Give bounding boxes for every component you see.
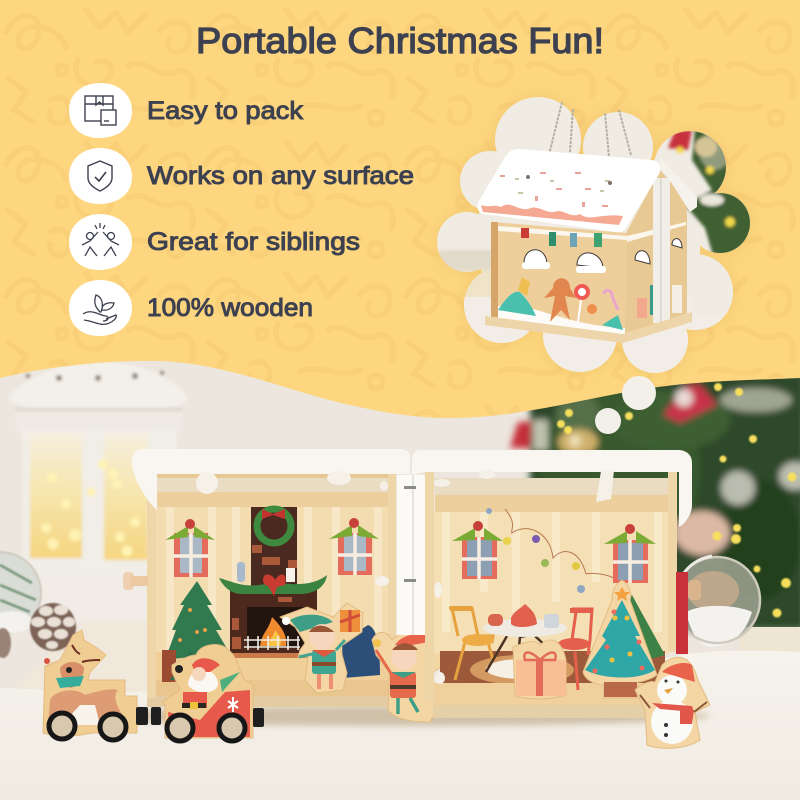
shadow under toy [90,706,710,726]
left room striped wall [156,507,388,682]
feature: easy to pack [69,83,304,138]
train: reindeer car [43,630,137,740]
feature: 100% wooden: 100% wooden [147,294,313,322]
rope knots left room [196,471,389,586]
thought cloud with closed house photo [437,97,750,373]
snowman toy [635,657,710,748]
blurred christmas tree [510,372,800,630]
side knob [123,572,148,590]
hinge panel [397,475,425,635]
feature: great for siblings: Great for siblings [147,228,360,256]
blue backpack [342,625,380,678]
feature: works on any surface: Works on any surface [147,162,414,190]
elf toy with bell [372,632,447,722]
house front wall [492,222,627,335]
chairs and tea table [449,604,593,690]
house base [485,312,692,343]
elf toy holding present [280,603,363,693]
house side print [635,239,682,318]
snow floor [0,650,800,800]
thought bubbles [595,376,656,434]
left room posts [147,465,396,698]
open house right room [412,450,710,748]
right room floor [433,683,673,718]
house hinged panel [653,178,670,323]
yellow wave header with squiggle pattern [0,0,800,418]
glass bauble right [674,556,760,647]
gift toy [513,640,566,699]
train: santa sleigh car [162,645,264,741]
glass bauble left [0,552,41,634]
left room windows [165,518,379,577]
left room floor [147,652,397,707]
feature: great for siblings [69,214,360,270]
right room dark floor and rug [440,651,665,687]
pine cones [0,603,76,658]
rope handles [547,102,631,168]
right room top plank [435,478,668,512]
string lights [486,508,618,593]
cream tabletop [0,622,800,700]
right room windows [452,521,656,583]
house windows and stockings [521,228,606,273]
blurred lantern [8,361,188,622]
open house left room [123,449,447,722]
left room top plank [157,478,388,507]
christmas tree toy [583,580,657,698]
house side wall [625,170,687,336]
wall christmas tree [162,581,229,682]
right room roof [412,450,692,527]
feature list [69,83,414,336]
train connector [136,707,161,725]
background fir tree [620,595,665,662]
red side latch [676,572,701,654]
feature: 100% wooden [69,280,313,336]
rope knots right room [434,469,614,684]
right room posts [425,466,677,701]
fireplace and chimney [219,507,327,658]
feature: works on any surface [69,148,414,204]
feature: easy to pack: Easy to pack [147,97,304,125]
right room striped wall [433,512,669,654]
gingerbread and sweets scene [498,277,623,330]
title: Portable Christmas Fun! [196,20,604,61]
left room roof [132,449,410,510]
house roof [477,149,697,232]
